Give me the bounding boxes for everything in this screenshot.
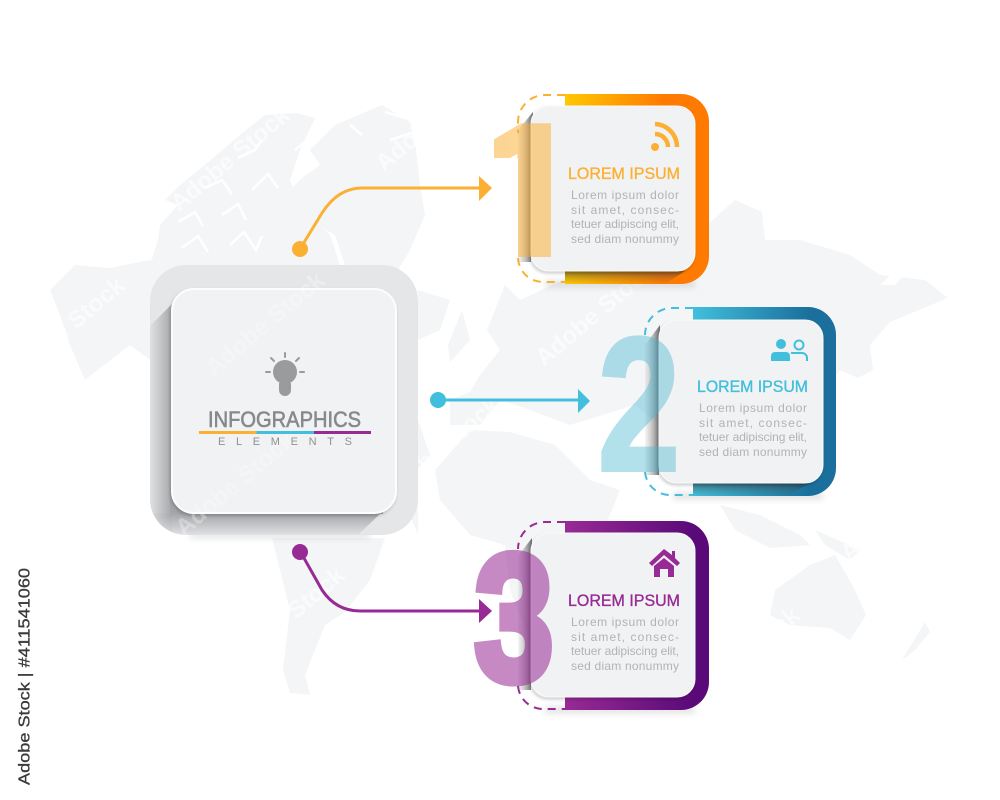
panel: central card: [150, 265, 418, 542]
body text 2: tetuer adipiscing elit,: [699, 430, 807, 444]
faint watermarks on central card: Adobe Stock: [200, 266, 331, 382]
watermark texts: Adobe Stock: [165, 101, 296, 217]
watermark texts: Adobe Stock: [530, 256, 661, 372]
body text 3: sed diam nonummy: [571, 659, 679, 673]
body text 3: Lorem ipsum dolor: [571, 615, 679, 629]
subheading: elements: ELEMENTS: [218, 436, 352, 448]
arrow 1: [292, 176, 492, 257]
panel: step 2: [598, 299, 836, 511]
watermark texts: Adobe Stock: [825, 116, 956, 232]
dashed outline 3: [518, 522, 565, 709]
arrow 2: [430, 389, 590, 413]
left shadow 3: [518, 538, 532, 690]
body text 2: Lorem ipsum dolor: [699, 401, 807, 415]
watermark texts: Adobe Stock: [700, 61, 831, 177]
watermark texts: Adobe Stock: [15, 591, 146, 707]
frame 2: [693, 307, 836, 496]
watermark texts: Adobe Stock: [40, 61, 171, 177]
body text 2: sed diam nonummy: [699, 445, 807, 459]
body text 1: sit amet, consec-: [571, 203, 679, 217]
frame 3: [565, 521, 709, 710]
faint watermarks on central card: Adobe Stock: [170, 426, 301, 542]
number 2: 2: [598, 299, 680, 511]
watermark texts: Adobe Stock: [375, 391, 506, 507]
panel: step 3: [474, 518, 709, 719]
body text 3: [571, 615, 679, 673]
body text 2: [699, 401, 807, 459]
left shadow 1: [518, 112, 533, 262]
body text 1: Lorem ipsum dolor: [571, 188, 679, 202]
body text 1: [571, 188, 679, 246]
world map: [50, 105, 948, 695]
heading: infographics: INFOGRAPHICS: [208, 407, 361, 432]
icon: home: [649, 549, 680, 577]
left shadow 2: [645, 325, 660, 475]
watermark texts: Adobe Stock: [675, 601, 806, 717]
icon: people: [771, 339, 807, 361]
body text 3: tetuer adipiscing elit,: [571, 644, 679, 658]
tricolour divider: [199, 431, 371, 434]
dashed outline 1: [518, 95, 565, 282]
card 2: [659, 320, 823, 483]
icon: light bulb: [266, 353, 304, 396]
dashed outline 2: [645, 308, 693, 495]
arrow 3: [292, 544, 492, 623]
bottom shadow 1: [565, 271, 685, 284]
icon: rss: [651, 124, 677, 151]
faint watermarks on central card: [170, 266, 331, 542]
body text 2: sit amet, consec-: [699, 416, 807, 430]
title 3: LOREM IPSUM: [568, 591, 680, 610]
watermark texts: Adobe Stock: [835, 451, 966, 567]
title 1: LOREM IPSUM: [568, 164, 680, 183]
body text 3: sit amet, consec-: [571, 630, 679, 644]
body text 1: sed diam nonummy: [571, 232, 679, 246]
number 1: 1: [472, 86, 588, 298]
body text 1: tetuer adipiscing elit,: [571, 217, 679, 231]
stock id label: Adobe Stock | #411541060: [16, 568, 34, 785]
panel: step 1: [494, 94, 709, 289]
watermark texts: Adobe Stock: [220, 561, 351, 677]
watermark texts: Adobe Stock: [370, 61, 501, 177]
watermark texts: Adobe Stock: [345, 601, 476, 717]
number 3: 3: [474, 518, 554, 719]
card 3: [531, 533, 695, 697]
bottom shadow 2: [693, 483, 810, 496]
frame 1: [565, 94, 709, 284]
watermark texts: Adobe Stock: [0, 271, 131, 387]
card 1: [531, 106, 695, 271]
title 2: LOREM IPSUM: [697, 377, 808, 396]
